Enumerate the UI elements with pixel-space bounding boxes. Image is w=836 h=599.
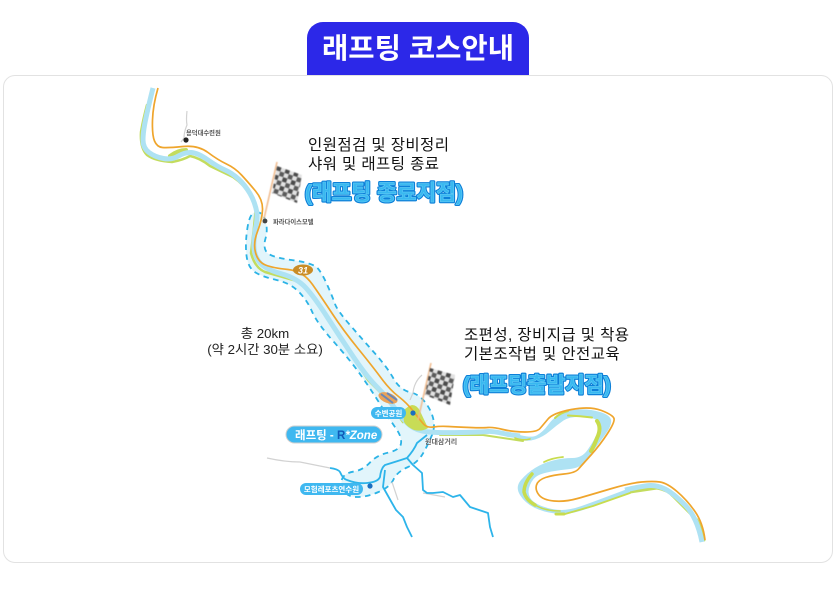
text block: distance and time [207,326,323,357]
text block: finish point tasks: 인원점검 및 장비정리 [308,136,449,154]
green river bank [141,105,704,540]
river: lower loop [510,409,630,514]
title: 래프팅 코스안내 [322,33,514,65]
green bank: lower loop [515,411,630,514]
river [143,88,702,542]
text block: start point tasks [464,326,629,363]
grey tributaries [181,111,445,500]
text block: distance and time: 총 20km [241,326,289,341]
marker: 파라다이스모텔 [263,217,314,226]
heading: finish point: (래프팅 종료지점) [305,181,463,205]
blue tributaries [330,435,493,537]
route map artwork [141,88,705,542]
road: orange route [152,88,705,540]
text block: start point tasks: 기본조작법 및 안전교육 [464,345,620,363]
heading: start point: (래프팅출발지점) [463,374,610,397]
text block: finish point tasks: 샤워 및 래프팅 종료 [308,155,439,173]
text block: distance and time: (약 2시간 30분 소요) [207,342,323,357]
green park area [403,405,428,431]
label: 모험레포츠연수원 [300,483,373,495]
label: 원대삼거리: 원대삼거리 [425,437,457,446]
heading: start point: (래프팅출발지점) [463,374,610,397]
marker: 파라다이스모텔: 파라다이스모텔 [273,217,314,226]
route badge 31 [293,264,313,276]
heading: finish point: (래프팅 종료지점) [305,181,463,205]
start flag [418,363,455,420]
legend: rafting R*Zone: 래프팅 - R*Zone [295,428,378,442]
finish flag [263,162,302,223]
marker: 용덕대수련원 [183,128,221,143]
route badge 31: 31 [298,266,308,276]
rafting zone: dashed area [246,212,434,497]
rafting boat icon [377,390,399,406]
label: 수변공원 [371,407,416,419]
label: 모험레포츠연수원: 모험레포츠연수원 [304,484,359,494]
text block: finish point tasks [308,136,449,173]
label: 수변공원: 수변공원 [375,408,402,418]
title [307,22,529,75]
text block: start point tasks: 조편성, 장비지급 및 착용 [464,326,629,344]
legend: rafting R*Zone [286,426,382,443]
marker: 용덕대수련원: 용덕대수련원 [186,128,221,137]
